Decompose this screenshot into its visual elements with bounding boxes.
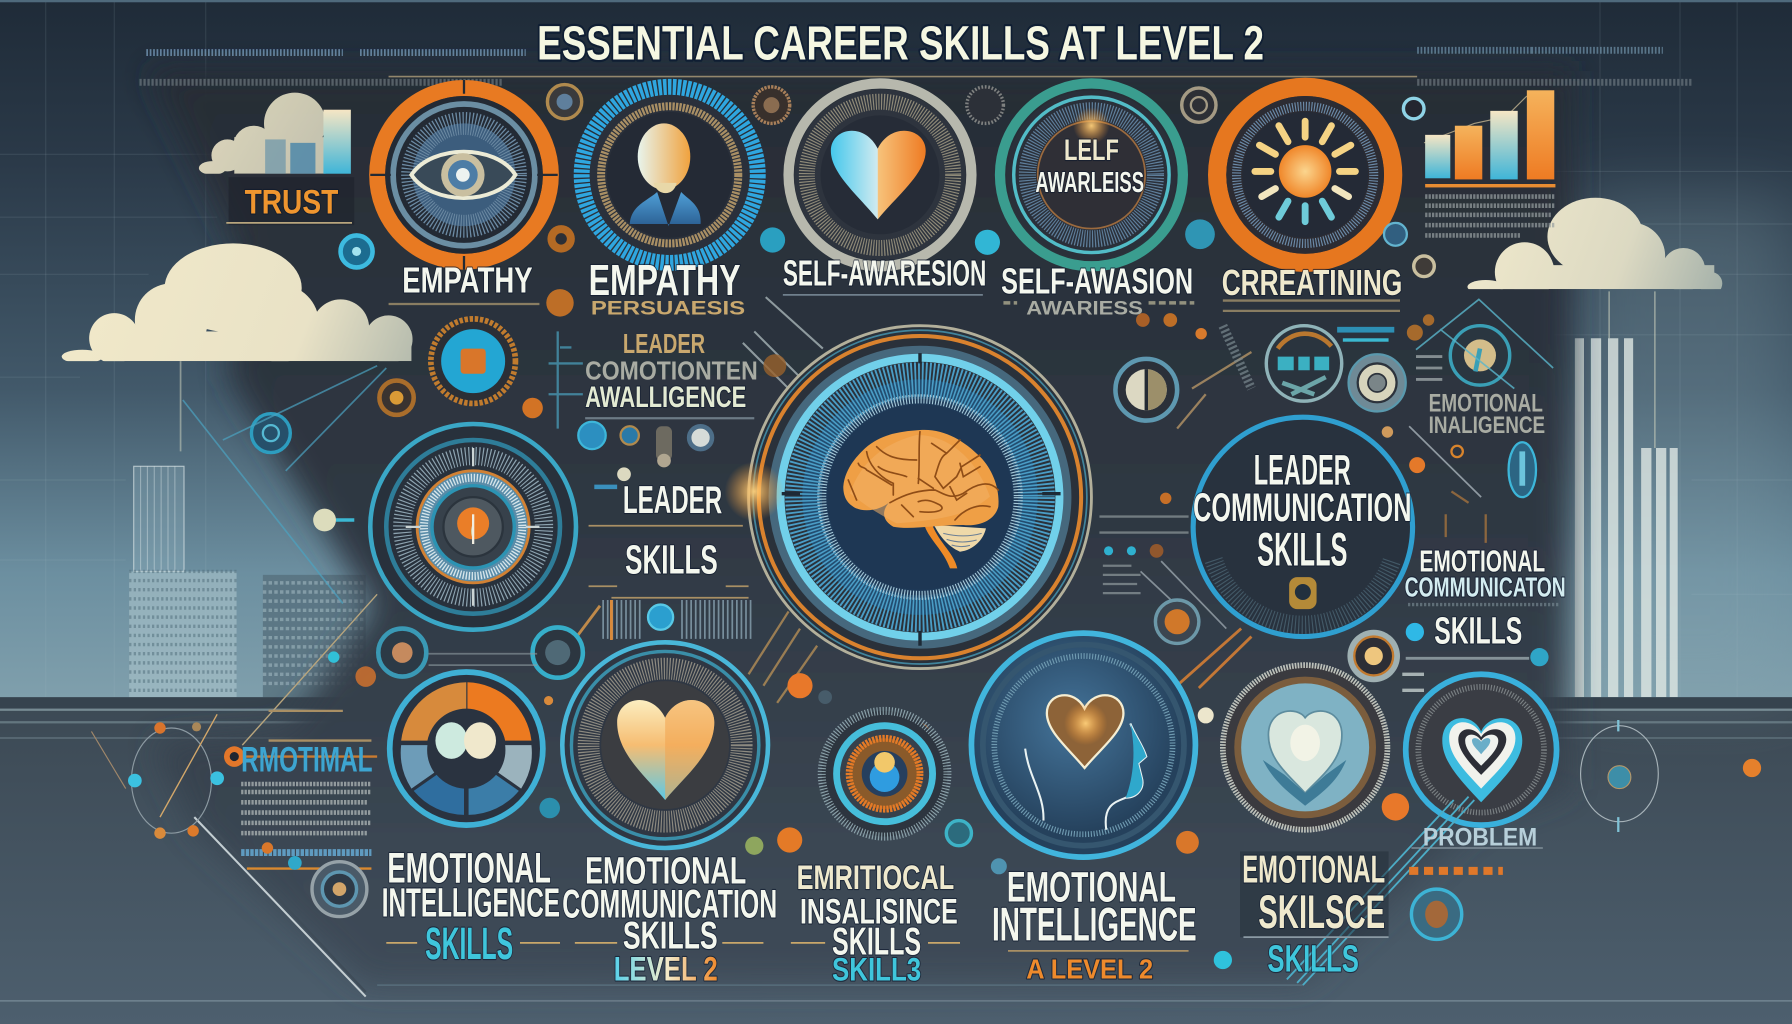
labels: top row: SELF-AWARESION [783,253,986,294]
labels: top row [389,253,1402,319]
icon: head profile [1025,723,1146,830]
labels: problem block: PROBLEM [1423,824,1537,852]
icon ring: head with heart [971,633,1195,857]
labels: bottom row: SKILLS [832,920,921,963]
emotional text panel [241,739,373,869]
cloud: top left [199,93,326,175]
labels: top row: SELF-AWASION [1001,261,1193,302]
labels: bottom row: INSALISINCE [800,891,958,931]
small target: right ghost [1287,720,1658,985]
right mid text block: EMOTIONAL [1429,389,1543,417]
icon: layered hearts [1442,718,1522,802]
labels: top row: AWARIESS [1026,297,1143,319]
labels: top row: CRREATINING [1222,262,1402,303]
horizontal band [0,697,1792,1002]
small icon: orange blue chip [431,319,515,403]
left mid text block: SKILLS [625,537,718,583]
labels: bottom row: A LEVEL 2 [1026,953,1153,984]
right mid text block [1099,389,1545,629]
icon ring: self awareness: LELF [1064,134,1119,167]
icon: person [630,123,701,226]
top ruled lines [139,50,1691,82]
icon: heart [831,131,926,219]
large ring: leader communication: COMMUNICATION [1193,486,1411,530]
bar chart: top right [1424,90,1555,235]
connector lines: lower left [91,594,1303,997]
icon ring: heart large [562,642,768,848]
left mid text block: LEADER [623,479,722,522]
labels: bottom row: SKILLS [425,918,513,969]
city buildings [129,291,1678,697]
left mid text block: COMOTIONTEN [585,355,758,385]
labels: bottom row: EMOTIONAL [1242,848,1385,891]
left mid text block: AWALLIGENCE [585,381,746,414]
icon: sun [1255,121,1355,222]
icon ring: empathy person [582,87,758,263]
bar chart: top left [265,110,351,174]
labels: bottom row: EMRITIOCAL [797,859,954,897]
right label: emotional communication skills: COMMUNICATON [1405,572,1566,603]
cloud: right [1467,198,1722,290]
labels: bottom row: LEVEL 2 [614,951,718,989]
labels: problem block [1409,824,1543,939]
icon ring: emotional intelligence gauge [390,672,543,825]
labels: bottom row: SKILLS [1267,937,1359,979]
labels: top row: EMPATHY [589,257,741,305]
central icon ring with brain [725,326,1091,669]
labels: bottom row: SKILLS [623,915,718,958]
right label: emotional communication skills: EMOTIONAL [1419,543,1545,578]
small icons: right mid [1115,299,1553,543]
icon ring: nested heart [1406,674,1557,825]
labels: bottom row: INTELLIGENCE [382,880,560,926]
labels: bottom row: INTELLIGENCE [992,899,1197,951]
main dark panel [149,71,1571,985]
labels: top row: PERSUAESIS [591,297,745,319]
icon ring: self awareness [1000,83,1183,266]
icon: brain [843,430,999,568]
icon ring: empathy eye [370,80,558,270]
small icon: lower left disc [262,842,367,917]
labels: bottom row: SKILSCE [1258,886,1385,938]
emotional text panel: RMOTIMAL [241,739,373,779]
labels: bottom row [382,844,1389,989]
small connector icons: left [183,297,823,603]
icon: heart gradient [617,700,714,800]
label: trust [226,177,354,225]
cloud: left large [62,243,413,363]
labels: bottom row: EMOTIONAL [387,844,551,891]
icon ring: self awareness: AWARLEISS [1035,167,1144,199]
title: ESSENTIAL CAREER SKILLS AT LEVEL 2 [537,17,1264,70]
large ring: leader communication: SKILLS [1257,524,1347,576]
icon: glowing heart [1047,695,1123,768]
large icon ring: left center [370,424,576,630]
labels: bottom row: EMOTIONAL [585,849,746,891]
icon ring: heart [789,83,971,266]
labels: bottom row: COMMUNICATION [562,883,777,927]
left mid text block: LEADER [623,328,705,359]
connectors and dots: lower middle [328,600,1761,969]
labels: bottom row: SKILL3 [832,952,921,988]
large ring: leader communication [1193,417,1413,637]
right mid text block: INALIGENCE [1429,412,1545,439]
left mid text block [566,328,758,651]
labels: top row: EMPATHY [402,260,533,301]
icon: eye [411,152,515,198]
small icons: top row [341,85,1434,317]
labels: bottom row: EMOTIONAL [1007,864,1176,911]
right label: emotional communication skills [1405,543,1566,666]
icon ring: creativity sun [1217,87,1393,263]
icon ring: target center [822,711,947,837]
right label: emotional communication skills: SKILLS [1434,609,1522,651]
large ring: leader communication: LEADER [1254,447,1351,494]
label: trust: TRUST [245,184,338,222]
icon ring: emotional shield [1223,665,1387,830]
